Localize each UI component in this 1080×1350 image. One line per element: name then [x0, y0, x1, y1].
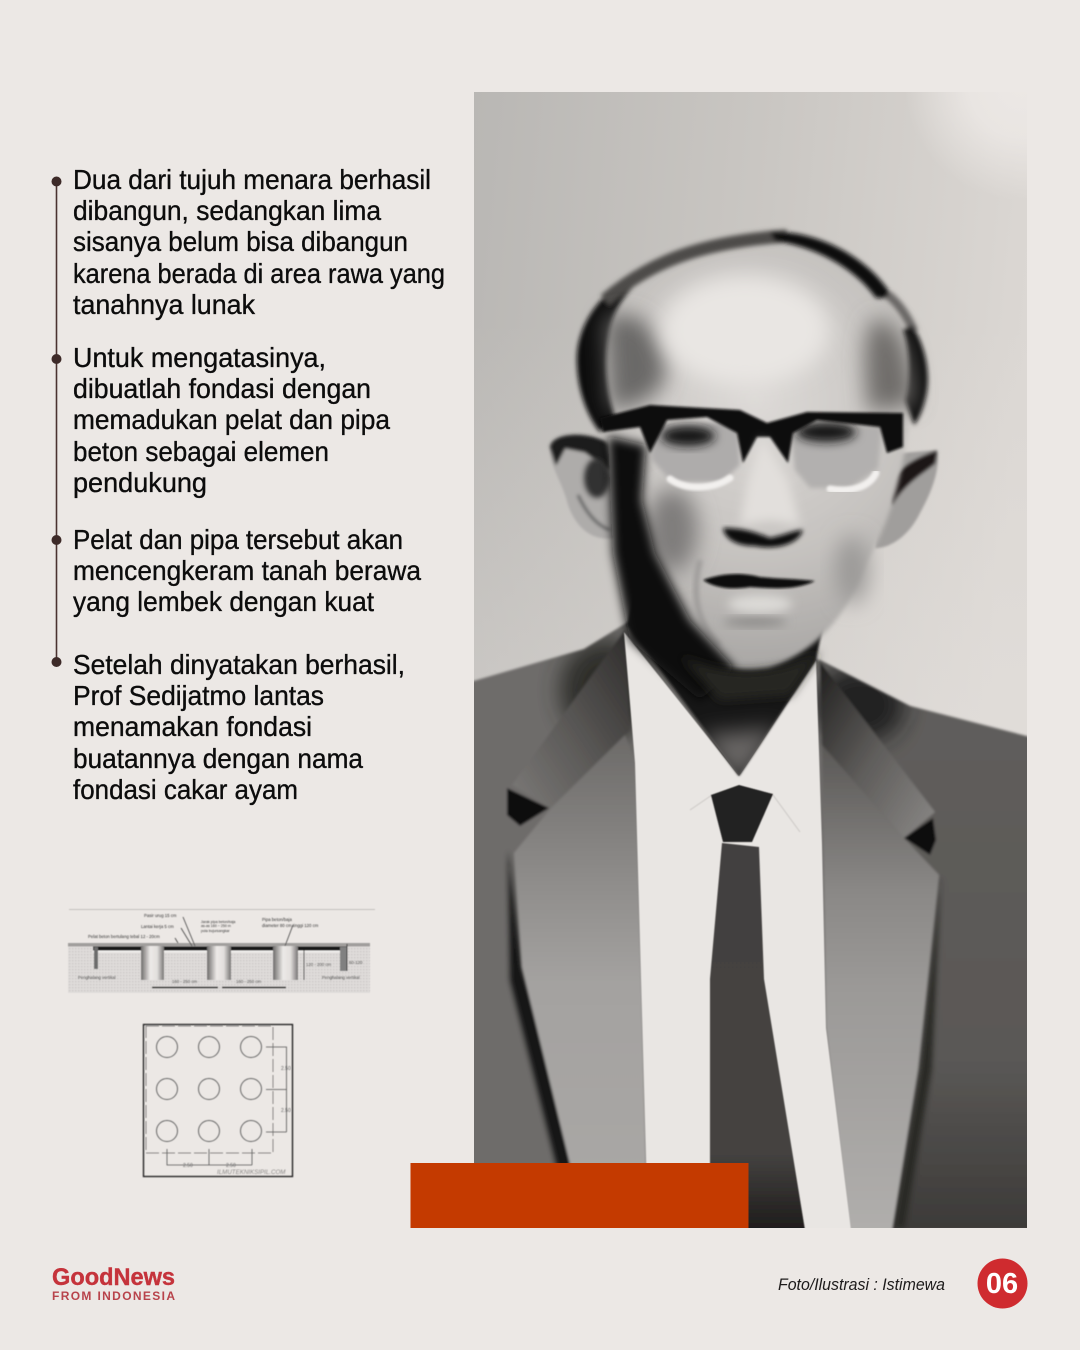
neck [626, 609, 823, 778]
hair [577, 232, 928, 432]
suit jacket [470, 622, 1030, 1230]
page number badge: 06 [986, 1268, 1018, 1300]
left collar [515, 631, 630, 787]
logo: GoodNews From Indonesia: FROM INDONESIA [52, 1289, 175, 1303]
lens tint [650, 422, 882, 488]
shoulder shadows [560, 640, 905, 743]
text block: point 2: Untuk mengatasinya, [73, 342, 326, 373]
nose [723, 438, 803, 547]
text block: point 4: menamakan fondasi [73, 711, 312, 742]
glasses frame [600, 405, 903, 463]
logo: GoodNews From Indonesia [52, 1264, 175, 1303]
diagram: foundation cross-section: Penghalang vertikal [322, 975, 360, 980]
text block: point 1: dibangun, sedangkan lima [73, 195, 382, 226]
cheek shading [646, 488, 868, 645]
diagram: pipe grid plan: ILMUTEKNIKSIPIL.COM [217, 1169, 286, 1176]
diagram: foundation cross-section: Pelat beton bertulang tebal 12 - 20cm [88, 934, 160, 939]
text block: point 3: mencengkeram tanah berawa [73, 555, 422, 586]
diagram: foundation cross-section: Pipa beton/baja [262, 917, 292, 922]
diagram: foundation cross-section: Lantai kerja 5 cm [141, 924, 174, 929]
text block: point 2 [73, 342, 391, 498]
text block: point 1 [73, 164, 445, 320]
right lapel [822, 745, 939, 1230]
timeline connector with bullets [52, 176, 62, 667]
neck lower tone [704, 716, 774, 775]
text block: point 4: Prof Sedijatmo lantas [73, 680, 324, 711]
text block: point 1: sisanya belum bisa dibangun [73, 226, 408, 257]
logo: GoodNews From Indonesia: GoodNews [52, 1264, 175, 1291]
portrait photo [470, 85, 1035, 1230]
white lens reflections [670, 473, 876, 490]
photo credit: Foto/Ilustrasi : Istimewa [778, 1276, 945, 1294]
diagram: foundation cross-section: Pasir urug 15 cm [144, 913, 177, 918]
diagram: foundation cross-section: 160 - 250 cm [236, 979, 261, 984]
right collar [820, 662, 935, 838]
text block: point 4: Setelah dinyatakan berhasil, [73, 649, 405, 680]
text block: point 2: pendukung [73, 467, 207, 498]
text block: point 4 [73, 649, 405, 805]
mouth [703, 574, 815, 588]
diagram: foundation cross-section: Penghalang vertikal [78, 975, 116, 980]
text block: point 3: Pelat dan pipa tersebut akan [73, 524, 403, 555]
diagram: foundation cross-section: diameter 80 cm tinggi 120 cm [262, 923, 319, 928]
text block: point 3 [73, 524, 422, 617]
face [607, 238, 910, 670]
diagram: foundation cross-section: as-as 160 ~ 250 m [201, 924, 231, 928]
shadow beside right lapel [894, 875, 941, 1228]
left ear [550, 435, 614, 539]
right ear [875, 450, 938, 548]
diagram: foundation cross-section: 60-120 [349, 960, 363, 965]
text block: point 1: Dua dari tujuh menara berhasil [73, 164, 431, 195]
diagram: pipe grid plan: 2.50 [226, 1163, 236, 1169]
text block: point 4: buatannya dengan nama [73, 743, 364, 774]
temple and forehead shading [605, 275, 914, 412]
diagram: foundation cross-section [68, 910, 375, 993]
diagram: pipe grid plan [144, 1024, 292, 1176]
diagram: foundation cross-section: Jarak pipa beton/baja [201, 920, 235, 924]
page number badge [978, 1258, 1028, 1308]
chin stubble shadow [680, 652, 820, 700]
diagram: pipe grid plan: 2.50 [281, 1066, 291, 1072]
lapel notch right [904, 818, 936, 855]
left lapel [514, 736, 646, 1163]
photo backdrop [474, 92, 1027, 736]
white shirt [624, 632, 851, 1230]
diagram: pipe grid plan: 2.50 [281, 1108, 291, 1114]
necktie [710, 785, 805, 1230]
text block: point 3: yang lembek dengan kuat [73, 586, 374, 617]
text block: point 2: beton sebagai elemen [73, 436, 329, 467]
text block: point 2: memadukan pelat dan pipa [73, 404, 391, 435]
text block: point 1: tanahnya lunak [73, 289, 255, 320]
diagram: foundation cross-section: 120 - 200 cm [306, 962, 331, 967]
collar shadow line [690, 795, 800, 832]
diagram: foundation cross-section: 160 - 250 cm [172, 979, 197, 984]
text block: point 1: karena berada di area rawa yang [73, 258, 445, 289]
diagram: pipe grid plan: 2.50 [183, 1163, 193, 1169]
text block: point 4: fondasi cakar ayam [73, 774, 298, 805]
lower lip highlight [723, 595, 792, 627]
top right fade [930, 92, 1027, 168]
left face shadow [608, 436, 735, 700]
shadow beneath left lapel [505, 854, 570, 1163]
lapel notch left [507, 788, 549, 826]
eyes [661, 422, 856, 446]
text block: point 2: dibuatlah fondasi dengan [73, 373, 371, 404]
diagram: foundation cross-section: pola bujursangkar [201, 929, 230, 933]
red accent block [410, 1163, 748, 1228]
